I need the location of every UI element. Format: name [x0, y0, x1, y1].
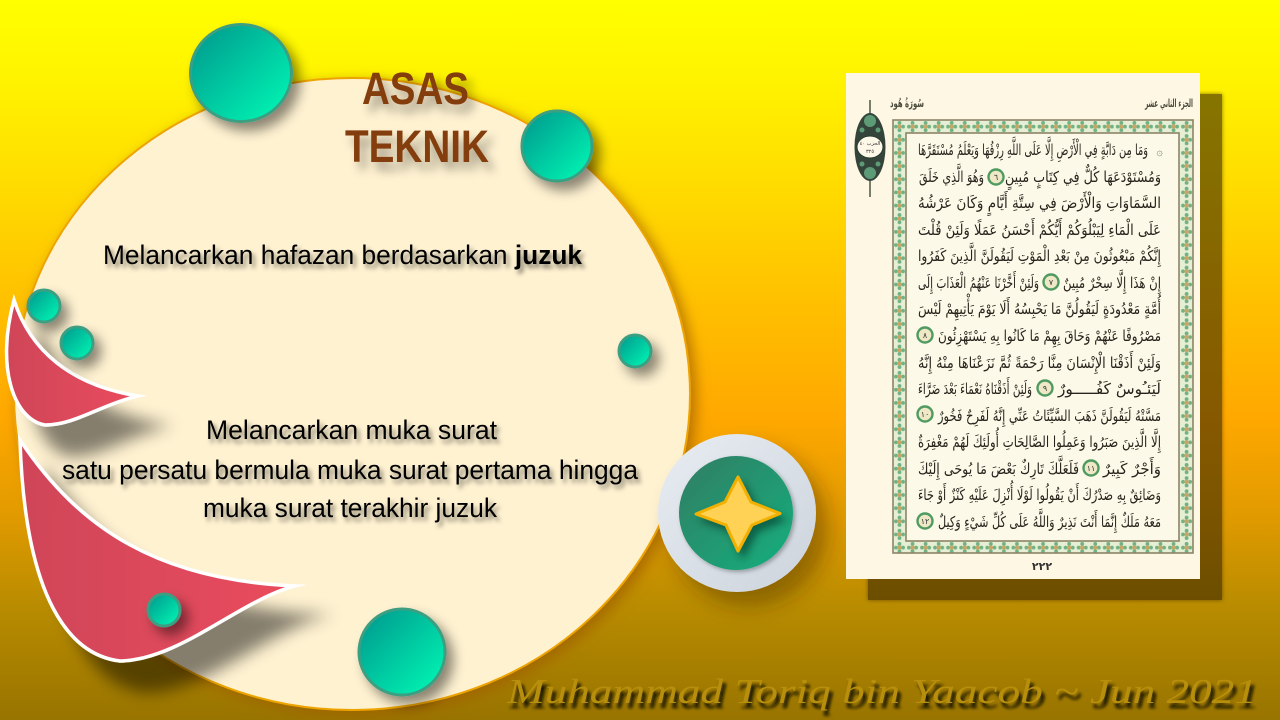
large red leaf shape: [20, 440, 295, 661]
text block: page by page: Melancarkan muka surat: [206, 415, 497, 445]
juz medallion: ٣٢٥: [866, 149, 874, 155]
juz medallion: [854, 100, 886, 197]
large cream circle panel: [14, 78, 690, 710]
Arabic verses text: إِنْ هَذَا إِلَّا سِحْرٌ مُبِينٌ: [1063, 270, 1161, 295]
verse number markers: ٩: [1043, 384, 1047, 393]
Arabic verses text: وَلَئِنْ أَخَّرْنَا عَنْهُمُ الْعَذَابَ إِلَى: [918, 270, 1039, 295]
title: ASAS: [362, 63, 469, 114]
verse number markers: ٨: [923, 331, 928, 340]
verse number markers: ١٠: [921, 410, 929, 419]
verse number markers: ١١: [1087, 464, 1095, 473]
text block: page by page: muka surat terakhir juzuk: [203, 493, 497, 523]
Arabic verses text: السَّمَاوَاتِ وَالْأَرْضَ فِي سِتَّةِ أَيَّامٍ وَكَانَ عَرْشُهُ: [918, 190, 1161, 216]
text block: page by page: [62, 415, 639, 523]
teal decorative circles: [28, 24, 651, 695]
Arabic verses text: وَلَئِنْ أَذَقْنَا الْإِنْسَانَ مِنَّا رَحْمَةً ثُمَّ نَزَعْنَاهَا مِنْهُ إِنَّهُ: [918, 350, 1161, 375]
Arabic verses text: وَهُوَ الَّذِي خَلَقَ: [919, 164, 984, 187]
verse number markers: ٦: [994, 173, 998, 182]
juz medallion: الحزب ٤٠: [860, 141, 880, 147]
verse number markers: [918, 170, 1098, 528]
verse number markers: ٧: [1049, 278, 1054, 287]
Quran page panel: [846, 73, 1200, 579]
Arabic verses text: وَأَجْرٌ كَبِيرٌ: [1102, 456, 1161, 480]
verse number markers: ١٢: [921, 517, 929, 526]
Arabic verses text: فَلَعَلَّكَ تَارِكٌ بَعْضَ مَا يُوحَى إِلَيْكَ: [918, 456, 1079, 481]
Arabic verses text: لَيَئـُوسٌ كَفُـــــورٌ: [1057, 380, 1161, 398]
title: [345, 63, 489, 172]
Arabic verses text: وَمُسْتَوْدَعَهَا كُلٌّ فِي كِتَابٍ مُبِينٍ: [1005, 163, 1161, 190]
page image shadow: [868, 94, 1222, 600]
star badge icon: [658, 434, 816, 592]
Quran page drawing: [854, 97, 1194, 573]
small red leaf shape: [7, 300, 138, 425]
page number: ٢٢٢: [1032, 560, 1052, 573]
Arabic verses text: [918, 137, 1164, 534]
author credit: Muhammad Toriq bin Yaacob ~ Jun 2021: [506, 672, 1257, 711]
text block: page by page: satu persatu bermula muka surat pertama hingga: [62, 455, 639, 485]
title: TEKNIK: [345, 121, 489, 172]
ornamental frame: [893, 120, 1193, 553]
Arabic verses text: عَلَى الْمَاءِ لِيَبْلُوَكُمْ أَيُّكُمْ أَحْسَنُ عَمَلًا وَلَئِنْ قُلْتَ: [918, 217, 1161, 239]
text block: hafazan by juzuk: Melancarkan hafazan berdasarkan juzuk: [103, 240, 583, 270]
Arabic verses text: ۞: [1157, 145, 1164, 158]
page header: surah name: سُورَةُ هُود: [890, 97, 924, 110]
Arabic verses text: وَلَئِنْ أَذَقْنَاهُ نَعْمَاءَ بَعْدَ ضَرَّاءَ: [918, 376, 1032, 398]
